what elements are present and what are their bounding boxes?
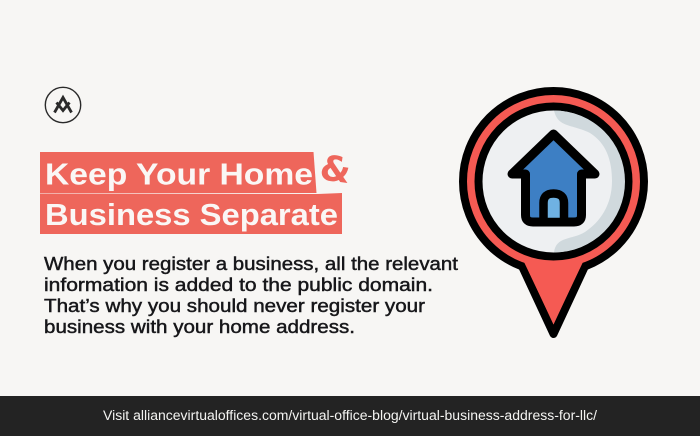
pin tail [520,262,587,334]
heading highlight: line one [40,152,316,193]
disc shadow [554,110,625,252]
ampersand: & [317,148,353,192]
icon: location pin with house [463,91,644,334]
pin outer ring [463,91,644,272]
body text [44,254,458,337]
footer bar [0,396,700,436]
tail fill over ring [517,240,590,324]
heading highlight: line two [40,193,342,234]
heading [40,148,353,234]
body text: That’s why you should never register your [44,296,425,316]
body text: business with your home address. [44,317,355,337]
house [512,134,595,222]
body text: When you register a business, all the relevant [44,254,458,274]
heading text: line two: Business Separate [45,197,338,232]
house door [544,194,564,222]
footer link text: Visit alliancevirtualoffices.com/virtual-office-blog/virtual-business-address-for-llc/ [103,408,597,423]
pin inner disc [478,106,628,256]
heading text: line one: Keep Your Home [45,156,313,192]
body text: information is added to the public domain. [44,275,433,295]
house body and roof [512,134,595,222]
icon: logo [45,87,81,123]
